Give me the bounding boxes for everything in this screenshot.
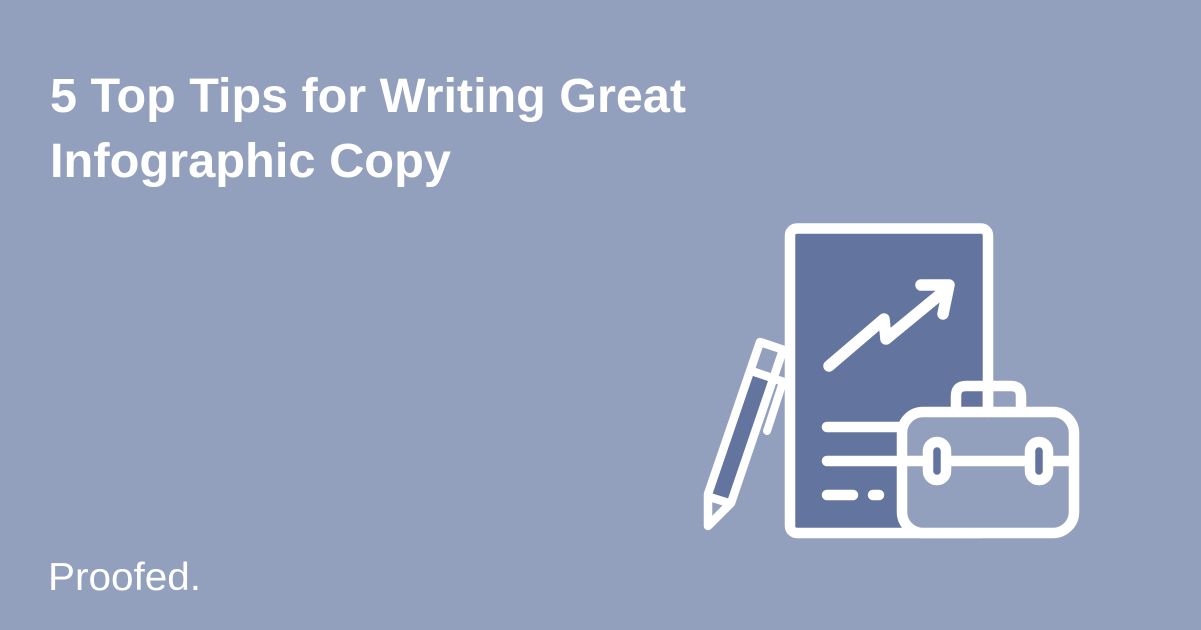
icon: document with chart <box>790 228 988 533</box>
icon: rising arrow <box>829 285 949 366</box>
title <box>50 70 686 188</box>
title: Infographic Copy <box>50 135 451 188</box>
icon: briefcase <box>902 386 1074 533</box>
icon: pencil <box>708 342 787 526</box>
title: 5 Top Tips for Writing Great <box>50 70 686 123</box>
icon: document, pencil and briefcase <box>708 228 1074 533</box>
document text lines <box>827 427 905 495</box>
logo: Proofed: Proofed. <box>48 556 201 599</box>
